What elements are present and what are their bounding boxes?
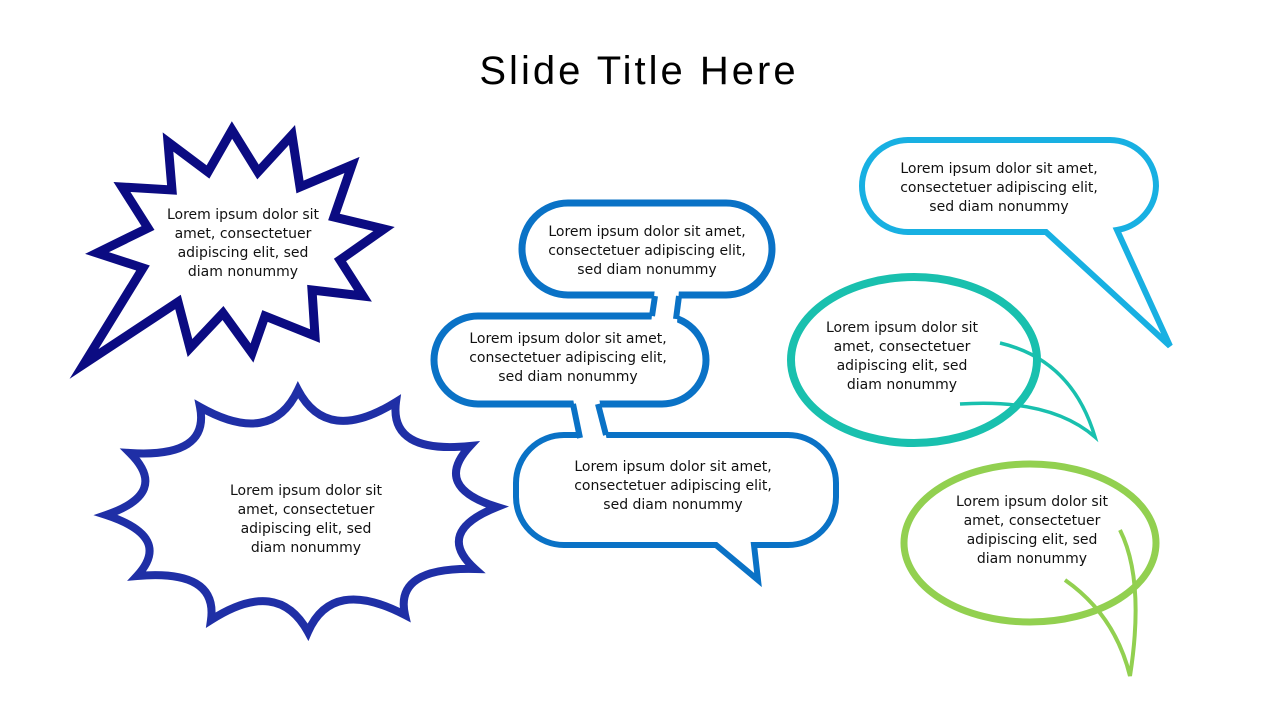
bubble: cyan speech: [862, 140, 1170, 346]
bubble: green oval speech: adipiscing elit, sed: [967, 532, 1097, 548]
bubble: teal oval speech: diam nonummy: [847, 377, 957, 393]
bubble: teal oval speech: Lorem ipsum dolor sit: [826, 320, 979, 336]
text: bubble A: consectetuer adipiscing elit,: [548, 243, 746, 259]
bubble: cyan speech: sed diam nonummy: [929, 199, 1069, 215]
text: bubble B: sed diam nonummy: [498, 369, 638, 385]
bubble: cyan speech: consectetuer adipiscing elit,: [900, 180, 1098, 196]
bubble: spiky burst: [106, 390, 497, 632]
bubble: green oval speech: [904, 464, 1156, 676]
text: bubble B: Lorem ipsum dolor sit amet,: [469, 331, 667, 347]
bubble: spiky burst: diam nonummy: [251, 540, 361, 556]
text: bubble C: sed diam nonummy: [603, 497, 743, 513]
bubble: spiky burst: amet, consectetuer: [238, 502, 375, 518]
bubble: jagged star: adipiscing elit, sed: [178, 245, 308, 261]
title: Slide Title Here: [479, 49, 799, 93]
bubble: teal oval speech: [791, 277, 1095, 443]
bubble: teal oval speech: adipiscing elit, sed: [837, 358, 967, 374]
bubble: green oval speech: Lorem ipsum dolor sit: [956, 494, 1109, 510]
bubble: green oval speech: diam nonummy: [977, 551, 1087, 567]
text: bubble C: Lorem ipsum dolor sit amet,: [574, 459, 772, 475]
bubble: spiky burst: adipiscing elit, sed: [241, 521, 371, 537]
bubble: spiky burst: Lorem ipsum dolor sit: [230, 483, 383, 499]
bubble group: chained speech bubbles: [434, 203, 836, 580]
bubble: jagged star: [84, 130, 384, 364]
text: bubble C: [574, 459, 772, 513]
text: bubble C: consectetuer adipiscing elit,: [574, 478, 772, 494]
text: bubble A: Lorem ipsum dolor sit amet,: [548, 224, 746, 240]
bubble: jagged star: amet, consectetuer: [175, 226, 312, 242]
bubble: green oval speech: amet, consectetuer: [964, 513, 1101, 529]
text: bubble B: [469, 331, 667, 385]
text: bubble A: sed diam nonummy: [577, 262, 717, 278]
bubble: jagged star: Lorem ipsum dolor sit: [167, 207, 320, 223]
text: bubble B: consectetuer adipiscing elit,: [469, 350, 667, 366]
text: bubble A: [548, 224, 746, 278]
bubble: cyan speech: Lorem ipsum dolor sit amet,: [900, 161, 1098, 177]
bubble: teal oval speech: amet, consectetuer: [834, 339, 971, 355]
bubble: jagged star: diam nonummy: [188, 264, 298, 280]
